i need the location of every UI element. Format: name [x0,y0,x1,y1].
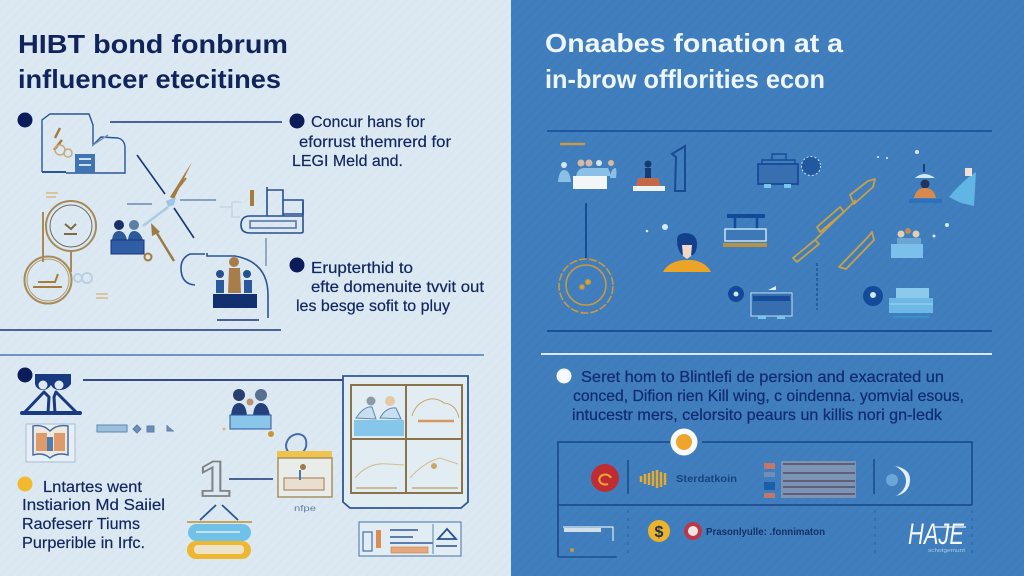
icon: large numeral one: 1 [199,451,231,507]
connector line to panel [83,379,343,381]
connector: vertical chain [585,203,587,260]
icon: basket of stacked pills [187,505,252,559]
legend swatches [764,463,775,498]
note: yellow bullet text: Instiarion Md Saiiel [22,497,165,514]
small label row [97,425,174,433]
note: second bullet text [290,258,485,315]
note: second bullet text: Erupterthid to [311,260,413,277]
icon: crescent moon [886,466,910,496]
note: white bullet text [556,368,964,424]
icon: central pen and spark [143,162,192,226]
icon: yellow topped card: nfpe [294,504,317,513]
panel: left background [0,0,511,576]
icon: bracket placeholder [563,527,613,552]
icon: red snowflake badge [684,522,702,540]
icon: blue machine and badge [758,154,820,188]
icon: framed four-panel board [343,376,468,508]
panel: right background [511,0,1024,576]
icon: machine sketch [220,187,303,266]
icon: document sketch [42,114,125,173]
left title: influencer etecitines [18,64,281,94]
icon: speaker at podium [633,160,665,191]
icon: gold diagonal capsule arrows [793,179,875,269]
icon: lower machine with badge [728,286,792,319]
bullet: first diagram marker [18,112,32,128]
signature mark: schotgemunt [928,548,966,554]
note: second bullet text: efte domenuite tvvit out [311,279,485,296]
arrow: brown diagonal [151,223,174,261]
label: second row: Prasonlyulle: .fonnimaton [706,527,825,538]
label: standard row: Sterdatkoin [676,474,737,485]
note: white bullet text: conced, Difion rien Kill wing, c oindenna. yomvial esous, [573,388,964,405]
icon: dollar coin [648,520,670,542]
icon: team at white table [558,144,616,189]
icon: seated person [949,172,976,206]
divider: dotted vertical [816,263,818,310]
note: first bullet text: Concur hans for [311,114,426,131]
icon: group at blue desk [222,389,274,437]
sparkle dots [646,150,949,238]
note: yellow bullet text [18,476,165,552]
icon: person under lamp [909,164,942,203]
icon: small head on seat [965,168,972,176]
right title: Onaabes fonation at a [545,28,844,58]
note: white bullet text: Seret hom to Blintlefi de persion and exacrated un [581,369,944,386]
note: first bullet text: eforrust themrerd for [299,134,452,151]
signature mark: HAJE [908,518,965,551]
bar list [781,461,856,498]
note: first bullet text: LEGI Meld and. [292,153,403,170]
right title: in-brow offlorities econ [545,64,825,94]
connector line to badge [229,478,273,480]
note: yellow bullet text: Raofeserr Tiums [22,516,140,533]
connector line to first note [110,121,282,123]
icon: gold gear ring [559,259,613,313]
note: yellow bullet text: Lntartes went [43,479,143,496]
icon: group in light box [891,228,923,258]
panel: upper right diagram [558,144,976,319]
note: second bullet text: les besge sofit to pluy [296,298,450,315]
icon: small info card [359,522,461,556]
icon: binoculars and figures [18,368,80,413]
left title: HIBT bond fonbrum [18,29,288,59]
note: white bullet text: intucestr mers, celorsito peaurs un killis nori gn-ledk [572,407,943,424]
table: bottom right grid [558,428,972,557]
icon: gold sound bars [641,470,665,488]
icon: yellow flower badge [670,428,698,456]
icon: yellow topped card [277,434,332,513]
icon: two people at desk [111,220,152,260]
diagonal connector lines [127,155,216,238]
panel: lower left diagram [18,368,468,559]
icon: gold linked circles [24,193,108,304]
icon: red circle logo [591,464,619,492]
icon: blue stacked desk with badge [863,286,933,318]
panel: upper left diagram [18,112,303,320]
icon: outlined numeral one [672,146,685,191]
right title [545,28,844,94]
icon: team at table in speech bubble [181,253,268,320]
left title [18,29,288,94]
icon: person with yellow shoulders [663,233,711,272]
icon: bench table [723,214,767,247]
note: first bullet text [290,114,452,170]
icon: dollar coin: $ [655,524,664,541]
icon: open book [26,424,75,462]
note: yellow bullet text: Purperible in Irfc. [22,535,145,552]
